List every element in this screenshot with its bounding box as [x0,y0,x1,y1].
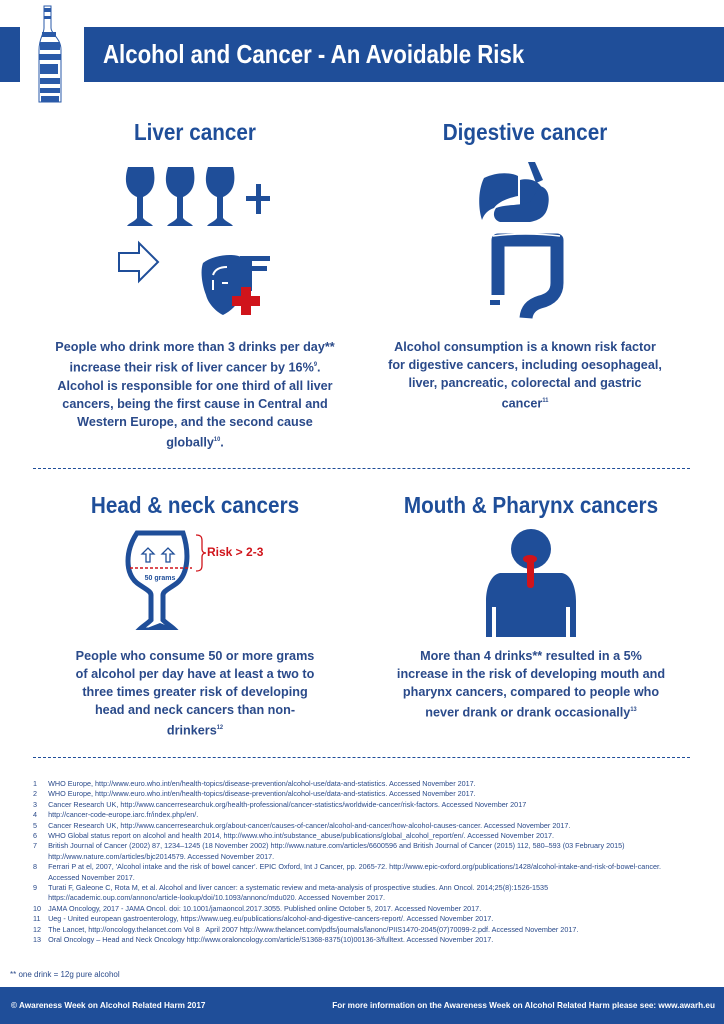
references: Accessed November 2017. [48,873,135,882]
title banner [84,27,724,82]
footer bar [0,987,724,1024]
title banner: Alcohol and Cancer - An Avoidable Risk [103,39,524,69]
text: mouth & pharynx [397,648,665,719]
text: liver cancer: People who drink more than 3 drinks per day** [55,339,335,354]
panel: liver cancer: cancers, being the first cause in Central and [62,396,328,411]
references: 7 [33,841,37,850]
footer right text: For more information on the Awareness Week on Alcohol Related Harm please see: www.awarh.eu [332,1001,715,1010]
text: liver cancer [55,339,335,374]
references: Cancer Research UK, http://www.cancerresearchuk.org/about-cancer/causes-of-cancer/alcohol-and-cancer/how-alcohol-causes-cancer. Accessed November 2017. [48,821,570,830]
references: 13 [33,935,41,944]
references: British Journal of Cancer (2002) 87, 1234–1245 (18 November 2002) http://www.nature.com/articles/6600596 and British Journal of Cancer (2015) 112, 580–593 (03 February 2015) [48,841,625,850]
text: digestive cancer: for digestive cancers, including oesophageal, [388,357,662,372]
text: mouth & pharynx: pharynx cancers, compared to people who [403,684,659,699]
footer left text: © Awareness Week on Alcohol Related Harm 2017 [11,1001,205,1010]
references: http://cancer-code-europe.iarc.fr/index.php/en/. [48,810,198,819]
icon: wine glass with risk: Risk > 2-3 [207,545,264,559]
references: 6 [33,831,37,840]
references: 4 [33,810,37,819]
references: 11 [33,914,41,923]
text: head & neck: of alcohol per day have at least a two to [76,666,314,681]
references: Oral Oncology – Head and Neck Oncology http://www.oraloncology.com/article/S1368-8375(10)00136-3/fulltext. Accessed November 2017. [48,935,493,944]
references: WHO Europe, http://www.euro.who.int/en/health-topics/disease-prevention/alcohol-use/data-and-statistics. Accessed November 2017. [48,779,476,788]
text: digestive cancer [388,339,662,410]
references [33,779,661,944]
panel: liver cancer: Alcohol is responsible for one third of all liver [57,378,333,393]
panel: digestive cancer [388,119,662,410]
references: 10 [33,904,41,913]
text: head & neck: head and neck cancers than non- [95,702,295,717]
references: 5 [33,821,37,830]
references: Ueg - United european gastroenterology, https://www.ueg.eu/publications/alcohol-and-digestive-cancers-report/. Accessed November 2017. [48,914,493,923]
text: liver cancer: increase their risk of liver cancer by 16%9. [69,359,321,374]
footnote: ** one drink = 12g pure alcohol [10,970,120,979]
heading: mouth & pharynx: Mouth & Pharynx cancers [404,492,658,518]
panel: liver cancer [55,119,335,449]
text: head & neck [76,648,314,737]
references: Turati F, Galeone C, Rota M, et al. Alcohol and liver cancer: a systematic review and meta-analysis of prospective studies. Ann Oncol. 2014;25(8):1526-1535 [48,883,548,892]
heading: head & neck: Head & neck cancers [91,492,299,518]
icon: digestive system [479,162,564,318]
references: 9 [33,883,37,892]
text: head & neck: drinkers12 [167,722,223,737]
heading: liver cancer: Liver cancer [134,119,256,145]
icon: person with red throat [486,529,576,637]
references: JAMA Oncology, 2017 - JAMA Oncol. doi: 10.1001/jamaoncol.2017.3055. Published online October 5, 2017. Accessed November 2017. [48,904,481,913]
references: 3 [33,800,37,809]
text: mouth & pharynx: increase in the risk of developing mouth and [397,666,665,681]
references: Ferrari P at el, 2007, 'Alcohol intake and the risk of bowel cancer'. EPIC Oxford, Int J Cancer, pp. 2065-72. http://www.epic-oxford.org/publications/1428/alcohol-intake-and-risk-of-bowel-cancer. [48,862,661,871]
text: digestive cancer: cancer11 [502,395,548,410]
header bar left [0,27,20,82]
text: digestive cancer: liver, pancreatic, colorectal and gastric [408,375,642,390]
heading: digestive cancer: Digestive cancer [443,119,607,145]
references: 2 [33,789,37,798]
references: http://www.nature.com/articles/bjc2014579. Accessed November 2017. [48,852,274,861]
panel: head & neck cancers [76,492,314,737]
references: WHO Europe, http://www.euro.who.int/en/health-topics/disease-prevention/alcohol-use/data-and-statistics. Accessed November 2017. [48,789,476,798]
icon: three glasses plus liver [118,167,270,315]
icon: wine glass with risk [126,530,264,630]
text: digestive cancer: Alcohol consumption is a known risk factor [394,339,656,354]
references: The Lancet, http://oncology.thelancet.com Vol 8 April 2007 http://www.thelancet.com/pdfs/journals/lanonc/PIIS1470-2045(07)70099-2.pdf. Accessed November 2017. [48,925,578,934]
text: head & neck: three times greater risk of developing [82,684,308,699]
references: 1 [33,779,37,788]
references: 8 [33,862,37,871]
panel: liver cancer: globally10. [166,434,224,449]
icon: wine glass with risk: 50 grams [145,575,175,582]
text: mouth & pharynx: More than 4 drinks** resulted in a 5% [420,648,642,663]
text: head & neck: People who consume 50 or more grams [76,648,314,663]
icon: bottle logo [38,6,62,102]
references: https://academic.oup.com/annonc/article-lookup/doi/10.1093/annonc/mdu020. Accessed November 2017. [48,893,385,902]
references: Cancer Research UK, http://www.cancerresearchuk.org/health-professional/cancer-statistics/worldwide-cancer/risk-factors. Accessed November 2017 [48,800,526,809]
references: WHO Global status report on alcohol and health 2014, http://www.who.int/substance_abuse/publications/global_alcohol_report/en/. Accessed November 2017. [48,831,554,840]
panel: mouth & pharynx cancers [397,492,665,719]
panel: liver cancer: Western Europe, and the second cause [77,414,313,429]
references: 12 [33,925,41,934]
text: mouth & pharynx: never drank or drank occasionally13 [425,704,637,719]
